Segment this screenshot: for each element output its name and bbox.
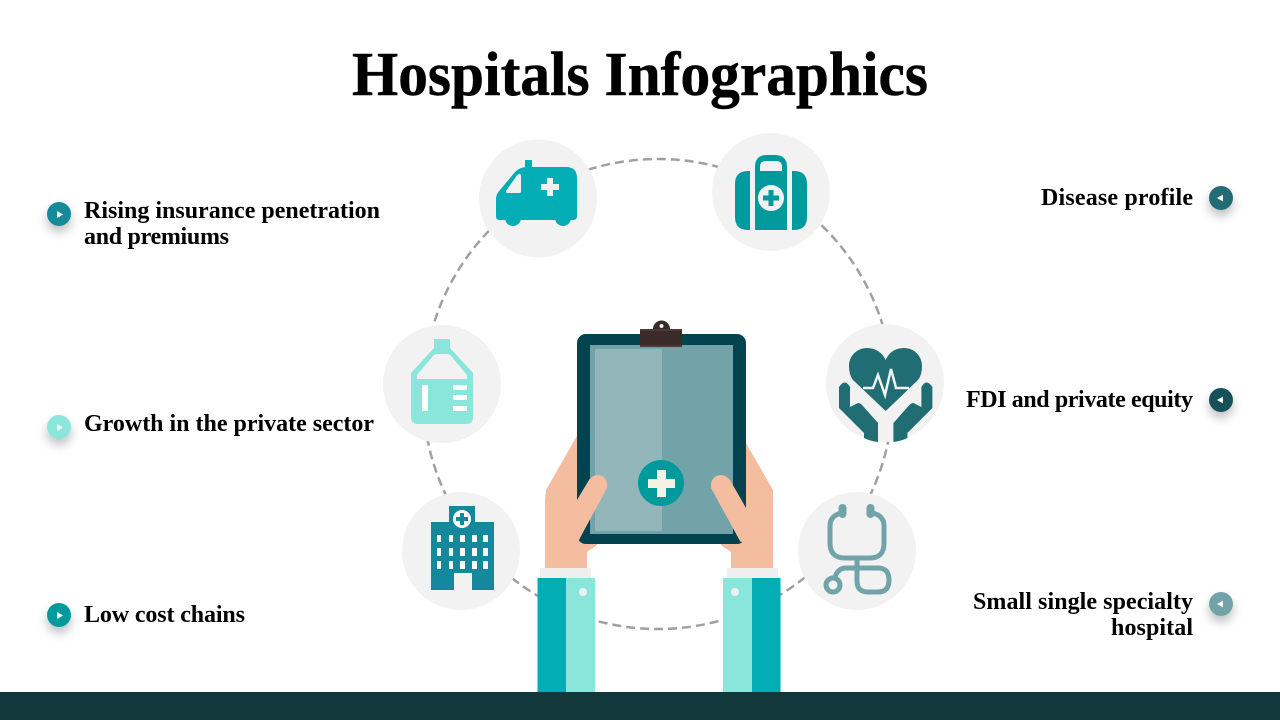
item: small single specialty hospital bbox=[973, 589, 1233, 641]
icon: heart in hands bbox=[826, 324, 944, 442]
left palm bbox=[545, 434, 600, 568]
footer bar bbox=[0, 692, 1280, 720]
icon: medical bag bbox=[712, 133, 830, 251]
central illustration: hands holding clipboard bbox=[538, 320, 780, 692]
item: rising insurance: and premiums bbox=[84, 224, 229, 250]
item: small single specialty hospital: hospital bbox=[1111, 615, 1193, 641]
item: small single specialty hospital: Small single specialty bbox=[973, 589, 1193, 615]
title: Hospitals Infographics bbox=[352, 41, 928, 109]
icon: bottle bbox=[383, 325, 501, 443]
left thumb bbox=[575, 475, 607, 545]
right thumb bbox=[711, 475, 748, 546]
item: private sector growth: Growth in the private sector bbox=[84, 411, 374, 437]
left sleeve bbox=[538, 568, 595, 692]
dashed ring bbox=[423, 159, 893, 629]
icon: ambulance bbox=[479, 140, 597, 258]
item: low cost chains: Low cost chains bbox=[84, 602, 245, 628]
clipboard bbox=[577, 320, 746, 544]
right sleeve bbox=[723, 568, 780, 692]
item: disease profile: Disease profile bbox=[1041, 185, 1193, 211]
item: rising insurance bbox=[47, 198, 380, 250]
item: FDI and private equity: FDI and private equity bbox=[966, 387, 1193, 413]
item: rising insurance: Rising insurance penetration bbox=[84, 198, 380, 224]
icon: hospital building bbox=[402, 492, 520, 610]
right palm bbox=[718, 443, 773, 568]
icon: stethoscope bbox=[798, 492, 916, 610]
